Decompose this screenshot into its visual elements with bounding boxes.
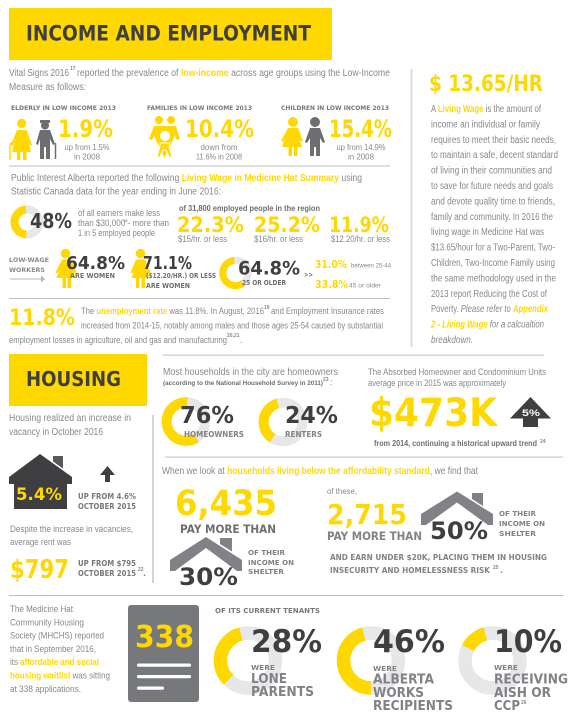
panel: living wage sidebar: breakdown.	[431, 335, 473, 346]
stat: 2,715 pay more than 50%: SHELTER	[499, 529, 536, 538]
label: of its current tenants: OF ITS CURRENT TENANTS	[215, 606, 320, 615]
label: low-wage workers with arrow	[9, 256, 49, 282]
donut stat: 28% lone parents: PARENTS	[251, 685, 314, 700]
stat: children in low income: in 2008	[348, 152, 375, 162]
stat: average rent $797: $797	[10, 555, 69, 585]
text: homeowners intro: (according to the National Household Survey in 2011)	[163, 380, 323, 387]
stat: average rent $797	[10, 555, 146, 585]
donut stat: 64.8% 25 or older: 45 or older	[349, 284, 381, 290]
stat: 6,435 pay more than 30%: INCOME ON	[248, 558, 294, 567]
icon: house outline 50%	[421, 492, 493, 545]
stat: 2,715 pay more than 50%: INCOME ON	[499, 519, 545, 528]
donut stat: 48% of earners: 1 in 5 employed people	[78, 228, 155, 238]
donut stat: 46% alberta works: WERE	[373, 664, 397, 673]
donut stat: 64.8% 25 or older	[218, 255, 392, 291]
donut stat: 10% receiving AISH or CCP: RECEIVING	[494, 672, 568, 688]
donut stat: 48% of earners: of all earners make less	[78, 208, 160, 218]
stat: unemployment rate: employment losses in agriculture, oil and gas and manufacturing	[9, 335, 227, 345]
stat: unemployment rate: 19	[264, 305, 270, 311]
text: housing waitlist: its affordable and social	[10, 657, 99, 667]
stat: children in low income: 15.4%	[329, 115, 392, 143]
text: rent intro	[10, 524, 133, 547]
donut stat: 24% renters: RENTERS	[285, 430, 322, 439]
intro text: low-income: reported the prevalence of low-income across age groups using the Low-Income	[77, 68, 390, 79]
icon: house outline 30%: 30%	[179, 563, 238, 591]
stat: $473K: $473K	[369, 391, 499, 436]
stat: 71.1% are women: ARE WOMEN	[146, 282, 190, 290]
icon: 5% up arrow: 5%	[522, 408, 540, 418]
stat: unemployment rate: The unemployment rate was 11.8%. In August, 2016	[81, 306, 264, 316]
donut stat: 48% of earners	[14, 208, 169, 238]
text: living wage summary intro: Public Interest Alberta reported the following Living Wage in Medicine Hat Summary using	[11, 173, 362, 184]
stats: share of employed by wage	[177, 204, 390, 244]
stat: 2,715 pay more than 50%: INSECURITY AND HOMELESSNESS RISK	[330, 566, 491, 575]
stat: families in low income: 11.6% in 2008	[196, 152, 242, 162]
text: vacancy change	[78, 492, 136, 511]
label: low-wage workers with arrow: LOW-WAGE	[9, 256, 49, 264]
stat: families in low income: FAMILIES IN LOW INCOME 2013	[147, 104, 252, 112]
text: price trend: from 2014, continuing a historical upward trend	[374, 439, 537, 448]
stat: children in low income: up from 14.9%	[336, 143, 386, 152]
text: affordability intro: When we look at households living below the affordability standard, we find that	[162, 466, 478, 477]
donut stat: 46% alberta works: 46%	[373, 624, 445, 660]
donut stat: 28% lone parents: WERE	[251, 663, 275, 672]
donut stat: 10% receiving AISH or CCP: WERE	[494, 663, 518, 672]
stat: 6,435 pay more than 30%	[170, 484, 294, 591]
text: living wage summary intro: Statistic Canada data for the year ending in June 2016:	[11, 186, 221, 198]
icon: house with 5.4% vacancy: 5.4%	[16, 485, 62, 505]
text: homeowners intro	[163, 367, 338, 387]
panel: living wage sidebar	[429, 72, 558, 346]
stat: unemployment rate: 11.8%	[9, 306, 75, 331]
stat: 64.8% are women	[56, 249, 125, 288]
stat: unemployment rate: increased from 2014-15, notably among males and those ages 25-54 caused by substantial	[81, 320, 383, 330]
stat: average rent $797: OCTOBER 2015	[78, 569, 136, 578]
panel: living wage sidebar: A Living Wage is the amount of	[431, 104, 541, 115]
stat: unemployment rate: .	[240, 335, 243, 345]
stats: share of employed by wage: of 31,800 employed people in the region	[179, 204, 320, 213]
text: vacancy change: UP FROM 4.6%	[78, 492, 136, 501]
icon: family	[149, 116, 180, 157]
donut stat: 64.8% 25 or older: >>	[304, 271, 313, 279]
panel: living wage sidebar: 2 - Living Wage for a calcualtion	[430, 320, 544, 331]
donut stat: 10% receiving AISH or CCP: CCP	[494, 699, 520, 714]
stat: 2,715 pay more than 50%: 25	[493, 565, 499, 571]
stat: 71.1% are women: 71.1%	[143, 253, 192, 274]
stat: families in low income: 10.4%	[185, 115, 254, 143]
stat: 64.8% are women: 64.8%	[66, 253, 125, 274]
donut stat: 46% alberta works	[344, 624, 453, 714]
stat: 6,435 pay more than 30%: PAY MORE THAN	[180, 522, 276, 536]
stat: elderly in low income: up from 1.5%	[64, 143, 110, 152]
text: average price intro: average price in 2015 was approximately	[368, 378, 506, 388]
text: housing waitlist: at 338 applications.	[10, 684, 81, 694]
donut stat: 24% renters	[256, 395, 338, 449]
text: housing waitlist: The Medicine Hat	[10, 604, 73, 614]
stat: elderly in low income: in 2008	[74, 152, 101, 162]
text: housing vacancy intro: vacancy in October 2016	[9, 427, 103, 438]
donut stat: 28% lone parents: 28%	[251, 624, 322, 660]
stat: 71.1% are women: ($12.20/HR.) OR LESS	[146, 272, 216, 280]
stat: 2,715 pay more than 50%: 2,715	[327, 498, 407, 531]
donut stat: 64.8% 25 or older: 31.0%	[315, 259, 347, 271]
donut stat: 76% homeowners: 76%	[180, 403, 234, 429]
stat: average rent $797: UP FROM $795	[78, 559, 136, 568]
stat: 2,715 pay more than 50%: OF THEIR	[499, 509, 536, 518]
donut stat: 10% receiving AISH or CCP	[456, 624, 568, 714]
icon: house outline 50%: 50%	[430, 517, 488, 545]
text: vacancy change: OCTOBER 2015	[78, 502, 136, 511]
text: housing vacancy intro: Housing realized an increase in	[9, 413, 131, 424]
stat: unemployment rate: 20,21	[227, 333, 240, 339]
text: housing waitlist: Community Housing	[10, 618, 84, 628]
icon: 5% up arrow	[510, 397, 551, 427]
text: housing waitlist: housing waitlist was sitting	[10, 670, 110, 680]
donut stat: 64.8% 25 or older: between 25-44	[351, 264, 392, 270]
text: price trend: 24	[540, 439, 546, 445]
donut stat: 46% alberta works: RECIPIENTS	[373, 699, 453, 714]
donut stat: 28% lone parents: LONE	[251, 672, 287, 687]
donut stat: 76% homeowners	[159, 395, 244, 448]
text: homeowners intro: :	[330, 377, 333, 387]
stats: share of employed by wage: 25.2%	[254, 213, 320, 237]
stats: share of employed by wage: $12.20/hr. or less	[331, 234, 390, 244]
stat: elderly in low income	[10, 104, 116, 162]
stat: 2,715 pay more than 50%: of these,	[327, 487, 357, 496]
stat: children in low income: CHILDREN IN LOW INCOME 2013	[281, 104, 389, 112]
panel: living wage sidebar: living wage in Medicine Hat was	[431, 227, 544, 238]
icon: children	[281, 117, 325, 156]
stat: unemployment rate	[9, 305, 384, 345]
stat: 6,435 pay more than 30%: 6,435	[175, 484, 277, 524]
stat: 6,435 pay more than 30%: SHELTER	[248, 567, 284, 576]
heading: housing	[9, 354, 147, 406]
stats: share of employed by wage: $15/hr. or less	[178, 234, 227, 244]
label: low-wage workers with arrow: WORKERS	[9, 266, 45, 274]
stats: share of employed by wage: 11.9%	[329, 213, 389, 237]
icon: document with 338	[128, 605, 199, 702]
text: homeowners intro: 23	[323, 377, 329, 383]
intro text: low-income: 17	[70, 66, 76, 72]
donut stat: 64.8% 25 or older: 33.8%	[315, 279, 348, 291]
stat: families in low income: down from	[200, 143, 238, 152]
donut stat: 76% homeowners: HOMEOWNERS	[184, 430, 244, 439]
donut stat: 46% alberta works: ALBERTA	[373, 672, 434, 688]
stat: elderly in low income: 1.9%	[58, 115, 113, 143]
stat: 2,715 pay more than 50%: AND EARN UNDER $20K, PLACING THEM IN HOUSING	[330, 553, 547, 562]
panel: living wage sidebar: Poverty. Please refer to Appendix	[431, 304, 548, 315]
text: rent intro: average rent was	[10, 537, 71, 547]
text: housing waitlist: Society (MHCHS) reported	[10, 630, 104, 640]
icon: document with 338: 338	[135, 620, 194, 655]
donut stat: 48% of earners: 18	[123, 218, 128, 223]
text: housing waitlist: that in September 2016,	[10, 644, 96, 654]
text: living wage summary intro	[11, 173, 362, 198]
icon: elderly couple	[10, 119, 56, 160]
title: income and employment	[9, 8, 332, 60]
text: housing vacancy intro	[9, 413, 131, 438]
text: average price intro	[368, 367, 546, 388]
text: average price intro: The Absorbed Homeowner and Condominium Units	[368, 367, 546, 377]
donut stat: 48% of earners: than $30,000 - more than	[78, 218, 169, 228]
donut stat: 64.8% 25 or older: 64.8%	[238, 258, 300, 280]
donut stat: 48% of earners: 48%	[30, 209, 72, 233]
stats: share of employed by wage: $16/hr. or less	[254, 234, 303, 244]
panel: living wage sidebar: $ 13.65/HR	[429, 72, 543, 97]
text: rent intro: Despite the increase in vacancies,	[10, 524, 133, 534]
intro text: low-income: Measure as follows:	[9, 82, 86, 93]
stat: families in low income	[147, 104, 254, 162]
stat: average rent $797: 22	[138, 567, 144, 573]
heading: housing: HOUSING	[26, 367, 121, 391]
icon: up arrow	[100, 466, 115, 482]
intro text: low-income: Vital Signs 2016	[9, 68, 69, 79]
stat: average rent $797: .	[143, 569, 146, 578]
stat: unemployment rate: and Employment Insurance rates	[271, 306, 384, 316]
donut stat: 28% lone parents	[209, 622, 322, 700]
stat: elderly in low income: ELDERLY IN LOW INCOME 2013	[11, 104, 116, 112]
text: housing waitlist	[10, 604, 110, 694]
stat: 2,715 pay more than 50%	[327, 487, 547, 575]
donut stat: 10% receiving AISH or CCP: 26	[521, 700, 527, 706]
stat: 2,715 pay more than 50%: PAY MORE THAN	[327, 529, 422, 543]
donut stat: 10% receiving AISH or CCP: 10%	[494, 624, 562, 660]
stat: 6,435 pay more than 30%: OF THEIR	[248, 548, 285, 557]
title: income and employment: INCOME AND EMPLOYMENT	[26, 22, 312, 46]
stat: children in low income	[281, 104, 392, 162]
stats: share of employed by wage: 22.3%	[177, 213, 244, 237]
stat: 64.8% are women: ARE WOMEN	[70, 272, 115, 280]
text: homeowners intro: Most households in the city are homeowners	[163, 367, 338, 378]
stat: 71.1% are women	[130, 249, 216, 290]
panel: living wage sidebar: income an individual or family	[431, 119, 540, 130]
icon: house with 5.4% vacancy	[9, 454, 72, 509]
donut stat: 64.8% 25 or older: 25 OR OLDER	[242, 279, 287, 287]
stat: 2,715 pay more than 50%: .	[500, 566, 503, 575]
donut stat: 10% receiving AISH or CCP: AISH OR	[494, 686, 551, 701]
donut stat: 46% alberta works: WORKS	[373, 686, 424, 701]
intro text: low-income	[9, 66, 390, 93]
donut stat: 24% renters: 24%	[285, 403, 338, 429]
